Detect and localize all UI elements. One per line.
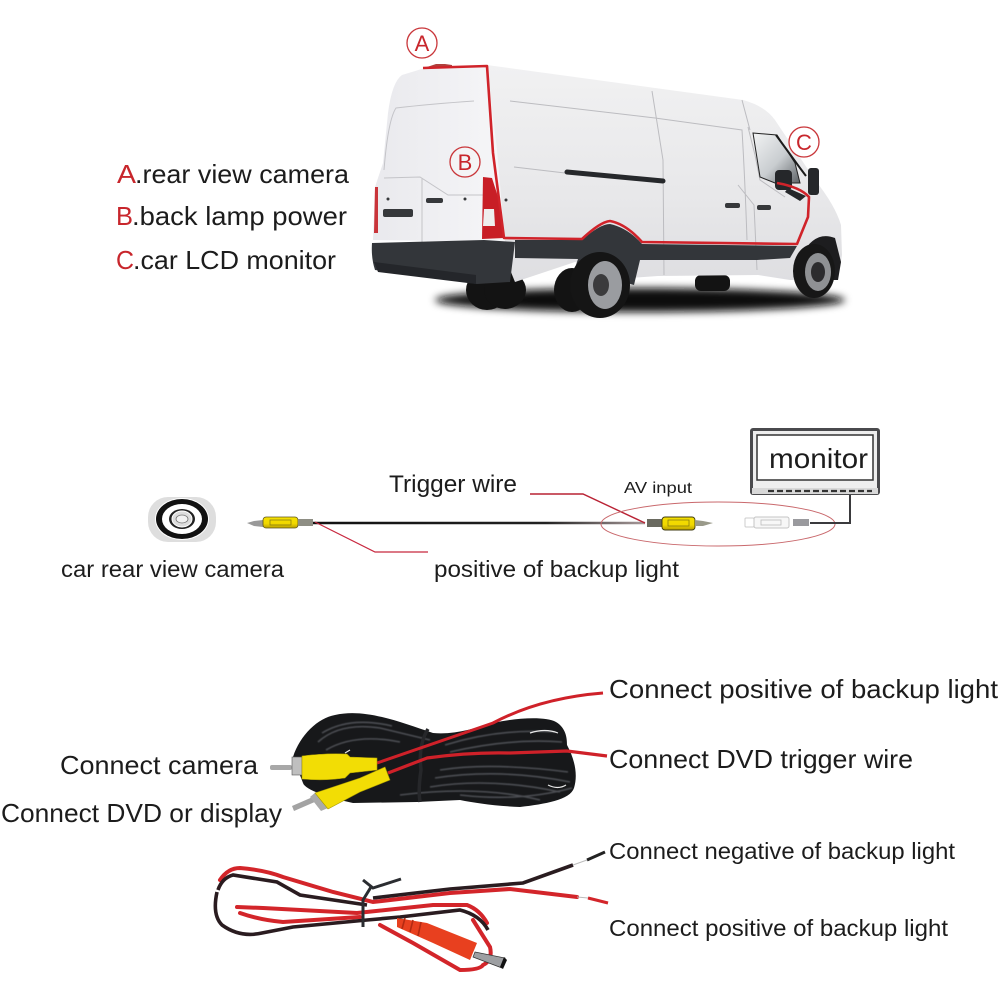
label: connect negative of backup light: Connect negative of backup light <box>609 838 956 864</box>
AV input highlight ellipse <box>601 502 835 546</box>
DC plug metal barrel <box>473 952 505 968</box>
bare wire tips <box>573 852 608 903</box>
icon: rear view camera <box>148 497 216 542</box>
legend item C: .car LCD monitor <box>133 245 336 275</box>
legend item C: C <box>116 245 134 275</box>
main video cable <box>313 522 645 524</box>
RCA video cable photo <box>1 674 999 828</box>
camera label: car rear view camera <box>61 556 284 582</box>
label circle C <box>789 127 819 157</box>
label circle A: A <box>415 31 430 56</box>
roof camera <box>423 64 452 68</box>
cable tie <box>363 879 401 927</box>
legend item A: .rear view camera <box>135 159 350 189</box>
label: connect camera: Connect camera <box>60 750 259 780</box>
monitor label: monitor <box>769 443 868 474</box>
display RCA plug <box>292 767 390 811</box>
label: connect DVD trigger wire: Connect DVD trigger wire <box>609 744 913 774</box>
bumper lower edge <box>374 262 476 284</box>
ground shadow <box>435 288 845 312</box>
tail light <box>482 177 504 239</box>
rear wheel <box>570 252 630 318</box>
monitor <box>750 428 880 495</box>
door and rear handles <box>383 198 771 217</box>
side panel lines <box>510 91 785 275</box>
cable coil highlights <box>318 722 572 800</box>
legend: camera, lamp and monitor key <box>116 159 350 275</box>
legend item B: B <box>116 201 133 231</box>
label: connect positive of backup light: Connect positive of backup light <box>609 674 999 704</box>
legend item B: .back lamp power <box>132 201 347 231</box>
DC plug body <box>397 918 477 960</box>
rear door panel lines <box>384 101 483 243</box>
label circle A <box>407 28 437 58</box>
AV input label: AV input <box>624 480 693 497</box>
black wire loops <box>215 865 573 934</box>
white coil gaps <box>345 730 566 788</box>
left tail light <box>374 187 378 233</box>
trigger wire line <box>530 494 645 523</box>
cable ties <box>419 729 428 802</box>
power cable photo <box>215 838 956 970</box>
legend item A: A <box>117 159 137 189</box>
positive of backup light label: positive of backup light <box>434 556 680 582</box>
red wire: DVD trigger <box>388 751 607 773</box>
side mirrors <box>775 168 819 201</box>
front wheel <box>793 236 841 298</box>
monitor cable <box>810 495 850 523</box>
side moulding bar <box>567 172 663 181</box>
label: connect positive of backup light: Connect positive of backup light <box>609 915 949 941</box>
label circle C: C <box>796 130 812 155</box>
label circle B <box>450 147 480 177</box>
camera RCA connector <box>247 517 313 528</box>
label circle B: B <box>458 150 472 175</box>
van illustration with wiring route <box>372 28 845 318</box>
red wire: positive of backup light <box>377 693 603 763</box>
side rub strip and wheel arch <box>515 224 797 285</box>
coiled cable bundle <box>293 713 576 807</box>
van side body <box>487 65 842 282</box>
wiring diagram <box>61 428 880 582</box>
red wire loops <box>220 868 577 970</box>
trigger wire label: Trigger wire <box>389 471 517 498</box>
rear bumper <box>372 240 515 284</box>
tail light lens <box>483 209 495 226</box>
line to positive of backup light <box>315 522 428 552</box>
DC plug end <box>500 957 507 969</box>
label: connect DVD or display: Connect DVD or display <box>1 798 282 828</box>
windscreen edge <box>776 135 806 176</box>
DC plug ribs <box>402 918 421 936</box>
AV RCA connector <box>647 517 713 530</box>
rear dual wheels <box>466 268 730 312</box>
wiring route <box>423 66 809 244</box>
monitor RCA socket, ghosted <box>745 517 809 528</box>
cab window <box>753 133 800 183</box>
van rear face <box>373 65 505 242</box>
camera RCA plug <box>270 754 377 780</box>
